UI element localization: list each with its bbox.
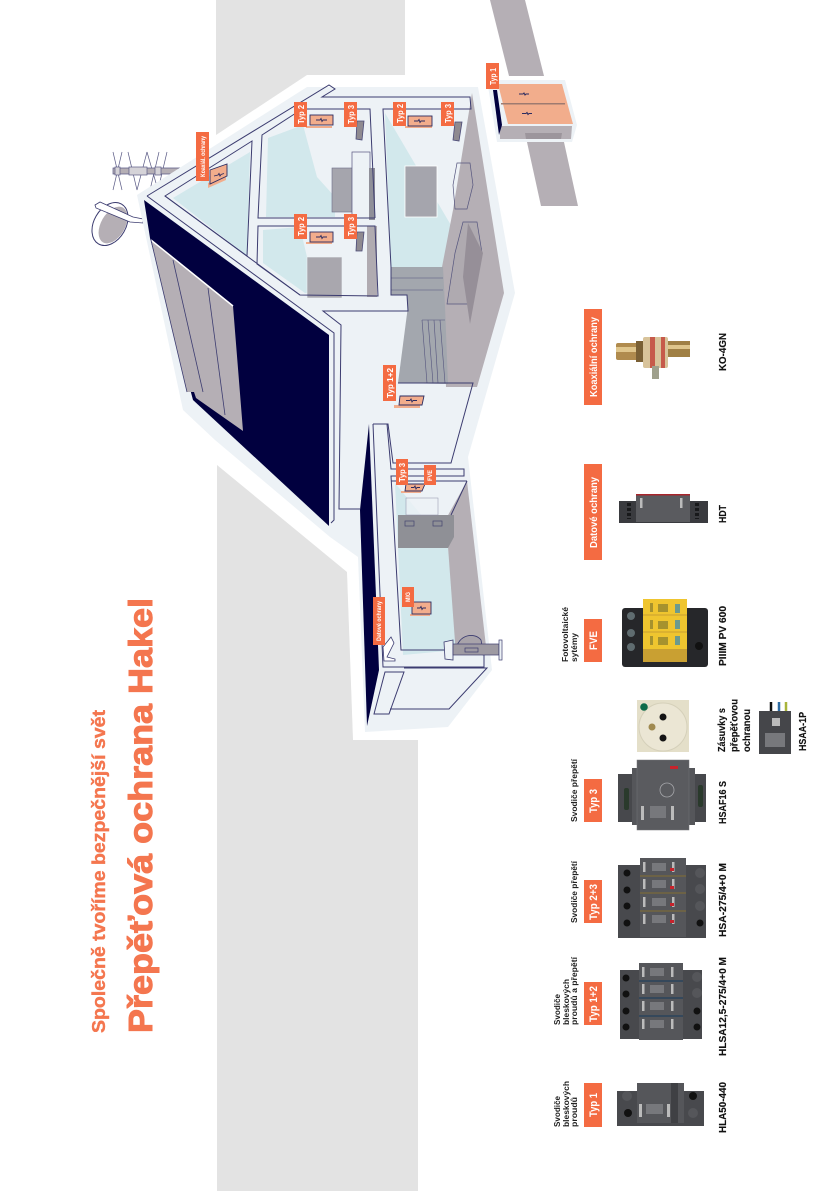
product model names: HSAF16 S xyxy=(717,781,729,824)
room: large right with stairs xyxy=(147,85,504,523)
room: ground floor xyxy=(373,424,502,714)
product model names: přepěťovou xyxy=(728,699,740,752)
product model names: HDT xyxy=(717,505,729,523)
navy roof side xyxy=(144,200,329,526)
navy side wall xyxy=(360,424,379,726)
icon: satellite dish xyxy=(85,196,143,252)
product model names: HLA50-440 xyxy=(717,1082,729,1133)
category descriptions: Svodiče xyxy=(553,993,562,1025)
background band xyxy=(216,0,418,1191)
title xyxy=(89,598,159,1033)
house tags: Koaxiál. ochrany xyxy=(201,135,207,177)
category descriptions: proudů a přepětí xyxy=(570,956,579,1025)
product model names: ochranou xyxy=(741,709,753,752)
solar panels xyxy=(151,240,243,431)
house tags: Typ 2 xyxy=(296,105,306,124)
room: lower left xyxy=(257,226,378,298)
category descriptions: bleskových xyxy=(562,1081,571,1127)
category descriptions: bleskových xyxy=(562,979,571,1025)
product: PIIIM PV 600 xyxy=(622,599,708,667)
category tags: Typ 2+3 xyxy=(588,884,600,920)
house tags: Typ 3 xyxy=(346,217,356,236)
category descriptions: Svodiče přepětí xyxy=(570,860,579,923)
house tags: Typ 3 xyxy=(443,104,453,123)
category descriptions: proudů xyxy=(570,1097,579,1127)
category descriptions: Svodiče xyxy=(553,1095,562,1127)
house tags: Typ 3 xyxy=(397,463,407,482)
building base halo xyxy=(137,87,515,732)
category tags: Koaxiální ochrany xyxy=(589,317,600,397)
product model names: HLSA12,5-275/4+0 M xyxy=(717,957,729,1056)
category tags: Datové ochrany xyxy=(589,477,600,548)
surge protector icons in rooms xyxy=(208,115,432,616)
category descriptions: sytémy xyxy=(570,632,579,662)
house tags: Typ 2 xyxy=(296,217,306,236)
product model names xyxy=(716,333,809,1133)
product model names: Zásuvky s xyxy=(716,708,728,752)
house tags xyxy=(196,63,499,645)
category descriptions: Fotovoltaické xyxy=(561,606,570,662)
house tags: Datové ochrany xyxy=(377,600,383,641)
product: HLSA12,5-275/4+0 M xyxy=(620,963,702,1040)
product: HSA-275/4+0 M xyxy=(618,858,706,938)
category descriptions: Svodiče přepětí xyxy=(570,758,579,822)
category tags: FVE xyxy=(588,631,600,650)
house tags: MIG xyxy=(406,592,412,602)
category tags xyxy=(584,309,602,1127)
product: KO-4GN xyxy=(616,337,690,379)
house tags: FVE xyxy=(428,470,434,481)
title: Přepěťová ochrana Hakel xyxy=(122,598,159,1033)
product: HLA50-440 xyxy=(617,1083,704,1126)
product model names: PIIIM PV 600 xyxy=(717,606,729,666)
category tags: Typ 3 xyxy=(588,789,600,813)
house tags: Typ 1+2 xyxy=(385,368,395,398)
product model names: HSAA-1P xyxy=(797,712,809,751)
category descriptions xyxy=(553,606,579,1127)
category tags: Typ 1+2 xyxy=(588,986,600,1022)
house tags: Typ 2 xyxy=(395,104,405,123)
house tags: Typ 3 xyxy=(346,105,356,124)
title: Společně tvoříme bezpečnější svět xyxy=(89,710,109,1033)
house tags: Typ 1 xyxy=(488,68,498,85)
product: socket xyxy=(637,700,689,752)
product: HDT xyxy=(619,494,708,523)
socket strip icons xyxy=(356,121,462,251)
road and type 1 distribution box xyxy=(487,0,578,206)
icon: antenna xyxy=(113,152,183,190)
room: upper left xyxy=(258,109,375,220)
category tags: Typ 1 xyxy=(588,1093,600,1117)
product model names: HSA-275/4+0 M xyxy=(717,863,729,937)
product: HSAA-1P xyxy=(759,702,791,754)
product: HSAF16 S xyxy=(618,760,706,830)
product model names: KO-4GN xyxy=(717,333,729,371)
room: attic xyxy=(165,141,252,256)
